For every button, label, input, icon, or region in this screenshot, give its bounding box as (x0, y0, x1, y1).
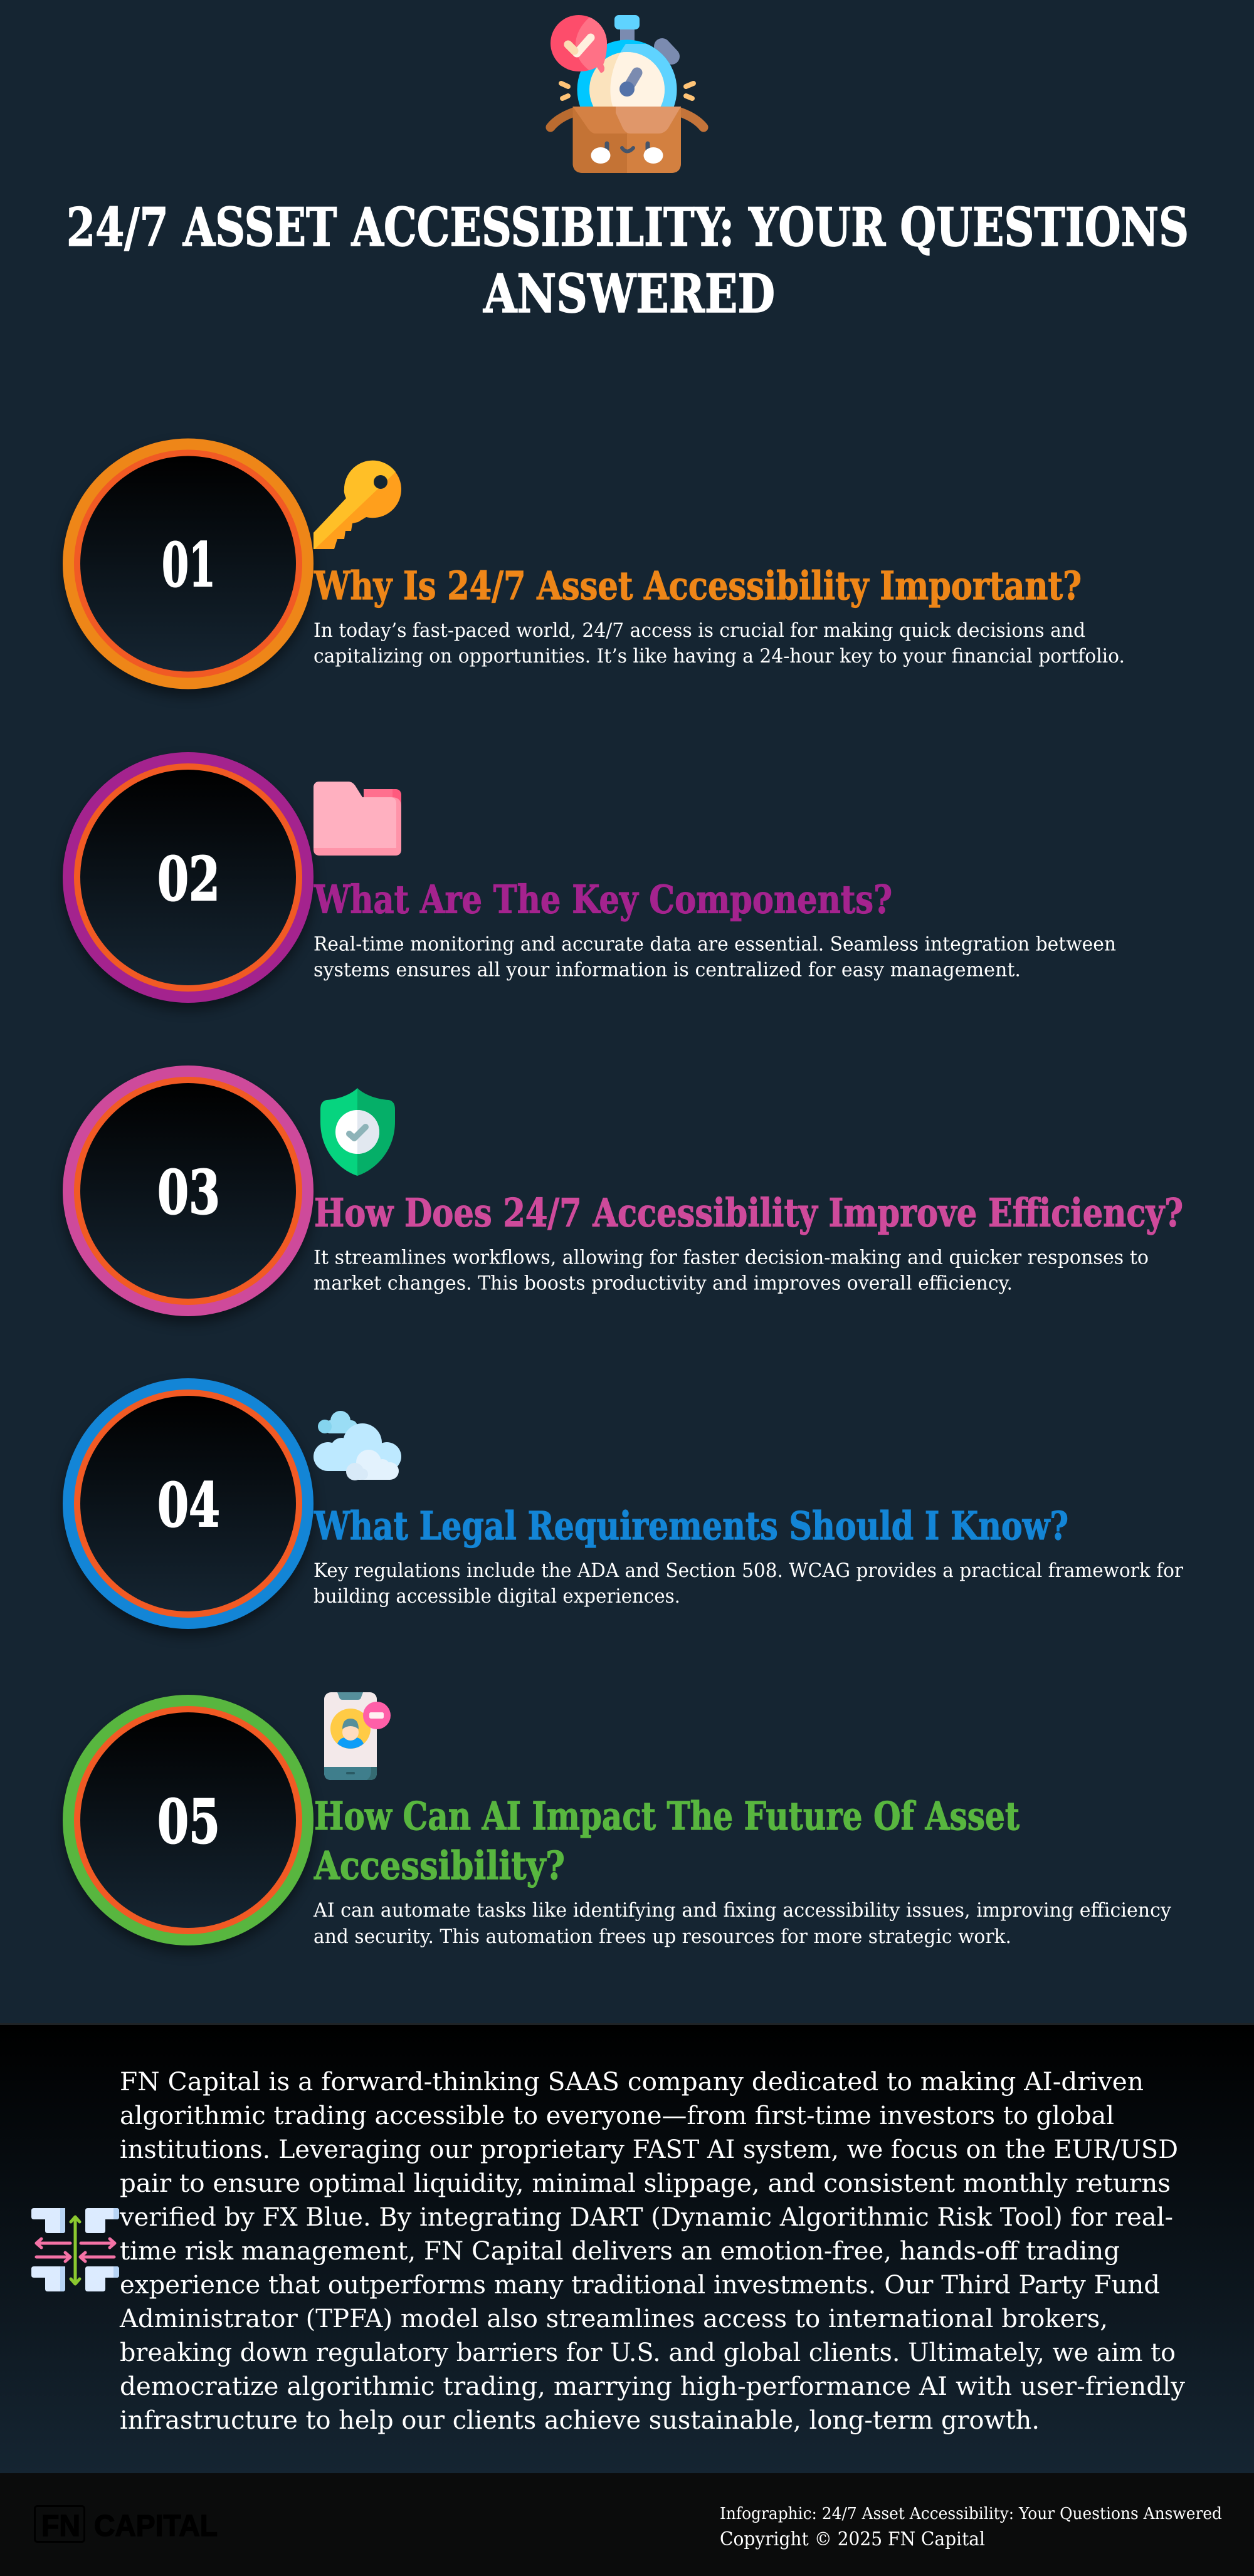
heading 02: What Are The Key Components? (314, 876, 892, 923)
text 01: In today’s fast-paced world, 24/7 access is crucial for making quick decisions and (314, 619, 1085, 642)
heading 05: Accessibility? (314, 1843, 565, 1888)
about text: algorithmic trading accessible to everyone—from first-time investors to global (120, 2102, 1114, 2130)
icon: key (314, 461, 401, 549)
panel: item 04 (63, 1378, 1183, 1636)
text 05: AI can automate tasks like identifying and fixing accessibility issues, improving efficiency (313, 1899, 1171, 1922)
about text: Administrator (TPFA) model also streamlines access to international brokers, (119, 2305, 1108, 2333)
text 05: and security. This automation frees up resources for more strategic work. (314, 1925, 1011, 1948)
text 04: Key regulations include the ADA and Section 508. WCAG provides a practical framework for (314, 1559, 1183, 1582)
title (66, 196, 1189, 325)
footer text (720, 2505, 1222, 2550)
number badge 01 (63, 439, 314, 696)
text 03: It streamlines workflows, allowing for faster decision-making and quicker responses to (314, 1246, 1149, 1269)
footer text: Infographic: 24/7 Asset Accessibility: Your Questions Answered (720, 2505, 1222, 2523)
about text: FN Capital is a forward-thinking SAAS company dedicated to making AI-driven (120, 2068, 1144, 2097)
text 03 (314, 1246, 1149, 1295)
heading 05: How Can AI Impact The Future Of Asset (314, 1793, 1020, 1839)
heading 05 (314, 1793, 1020, 1888)
number badge 05: 05 (157, 1786, 220, 1857)
icon: expand arrows (31, 2208, 119, 2291)
number badge 03: 03 (157, 1157, 220, 1228)
about text (119, 2068, 1185, 2435)
panel: item 01 (63, 439, 1125, 696)
icon: folder (314, 782, 401, 856)
logo: FN Capital: CAPITAL (94, 2510, 218, 2543)
logo: FN Capital: FN (41, 2510, 80, 2543)
panel: about FN Capital (0, 2023, 1254, 2473)
icon: stopwatch in box (551, 15, 703, 173)
about text: infrastructure to help our clients achieve sustainable, long-term growth. (120, 2406, 1040, 2435)
number badge 02: 02 (157, 844, 220, 914)
number badge 04: 04 (157, 1470, 220, 1541)
number badge 01: 01 (162, 530, 216, 600)
about text: institutions. Leveraging our proprietary FAST AI system, we focus on the EUR/USD (120, 2135, 1178, 2164)
about text: breaking down regulatory barriers for U.S. and global clients. Ultimately, we aim to (120, 2338, 1176, 2367)
icon: phone with user (324, 1692, 391, 1780)
text 02 (314, 933, 1116, 982)
logo: FN Capital (35, 2506, 218, 2543)
icon: clouds (314, 1411, 401, 1480)
text 05 (313, 1899, 1171, 1948)
text 04 (314, 1559, 1183, 1608)
about text: verified by FX Blue. By integrating DART (Dynamic Algorithmic Risk Tool) for real- (119, 2203, 1173, 2232)
heading 04: What Legal Requirements Should I Know? (314, 1503, 1068, 1549)
number badge 04 (63, 1378, 314, 1636)
text 03: market changes. This boosts productivity and improves overall efficiency. (314, 1272, 1013, 1295)
panel: item 02 (63, 752, 1116, 1010)
about text: experience that outperforms many traditional investments. Our Third Party Fund (120, 2271, 1160, 2300)
about text: time risk management, FN Capital delivers an emotion-free, hands-off trading (120, 2237, 1120, 2266)
text 04: building accessible digital experiences. (314, 1585, 680, 1608)
about text: pair to ensure optimal liquidity, minimal slippage, and consistent monthly returns (120, 2169, 1171, 2198)
icon: shield (320, 1088, 395, 1176)
heading 01: Why Is 24/7 Asset Accessibility Important? (314, 563, 1082, 609)
number badge 05 (63, 1695, 314, 1952)
text 01 (314, 619, 1125, 668)
text 02: systems ensures all your information is centralized for easy management. (314, 959, 1021, 982)
text 01: capitalizing on opportunities. It’s like having a 24-hour key to your financial portfolio. (314, 645, 1125, 668)
about text: democratize algorithmic trading, marrying high-performance AI with user-friendly (120, 2372, 1185, 2401)
panel: item 05 (63, 1692, 1171, 1952)
panel: footer (0, 2473, 1254, 2576)
number badge 03 (63, 1065, 314, 1323)
title: ANSWERED (483, 263, 775, 325)
panel: item 03 (63, 1065, 1183, 1323)
footer text: Copyright © 2025 FN Capital (720, 2528, 985, 2550)
number badge 02 (63, 752, 314, 1010)
text 02: Real-time monitoring and accurate data are essential. Seamless integration between (314, 933, 1116, 955)
